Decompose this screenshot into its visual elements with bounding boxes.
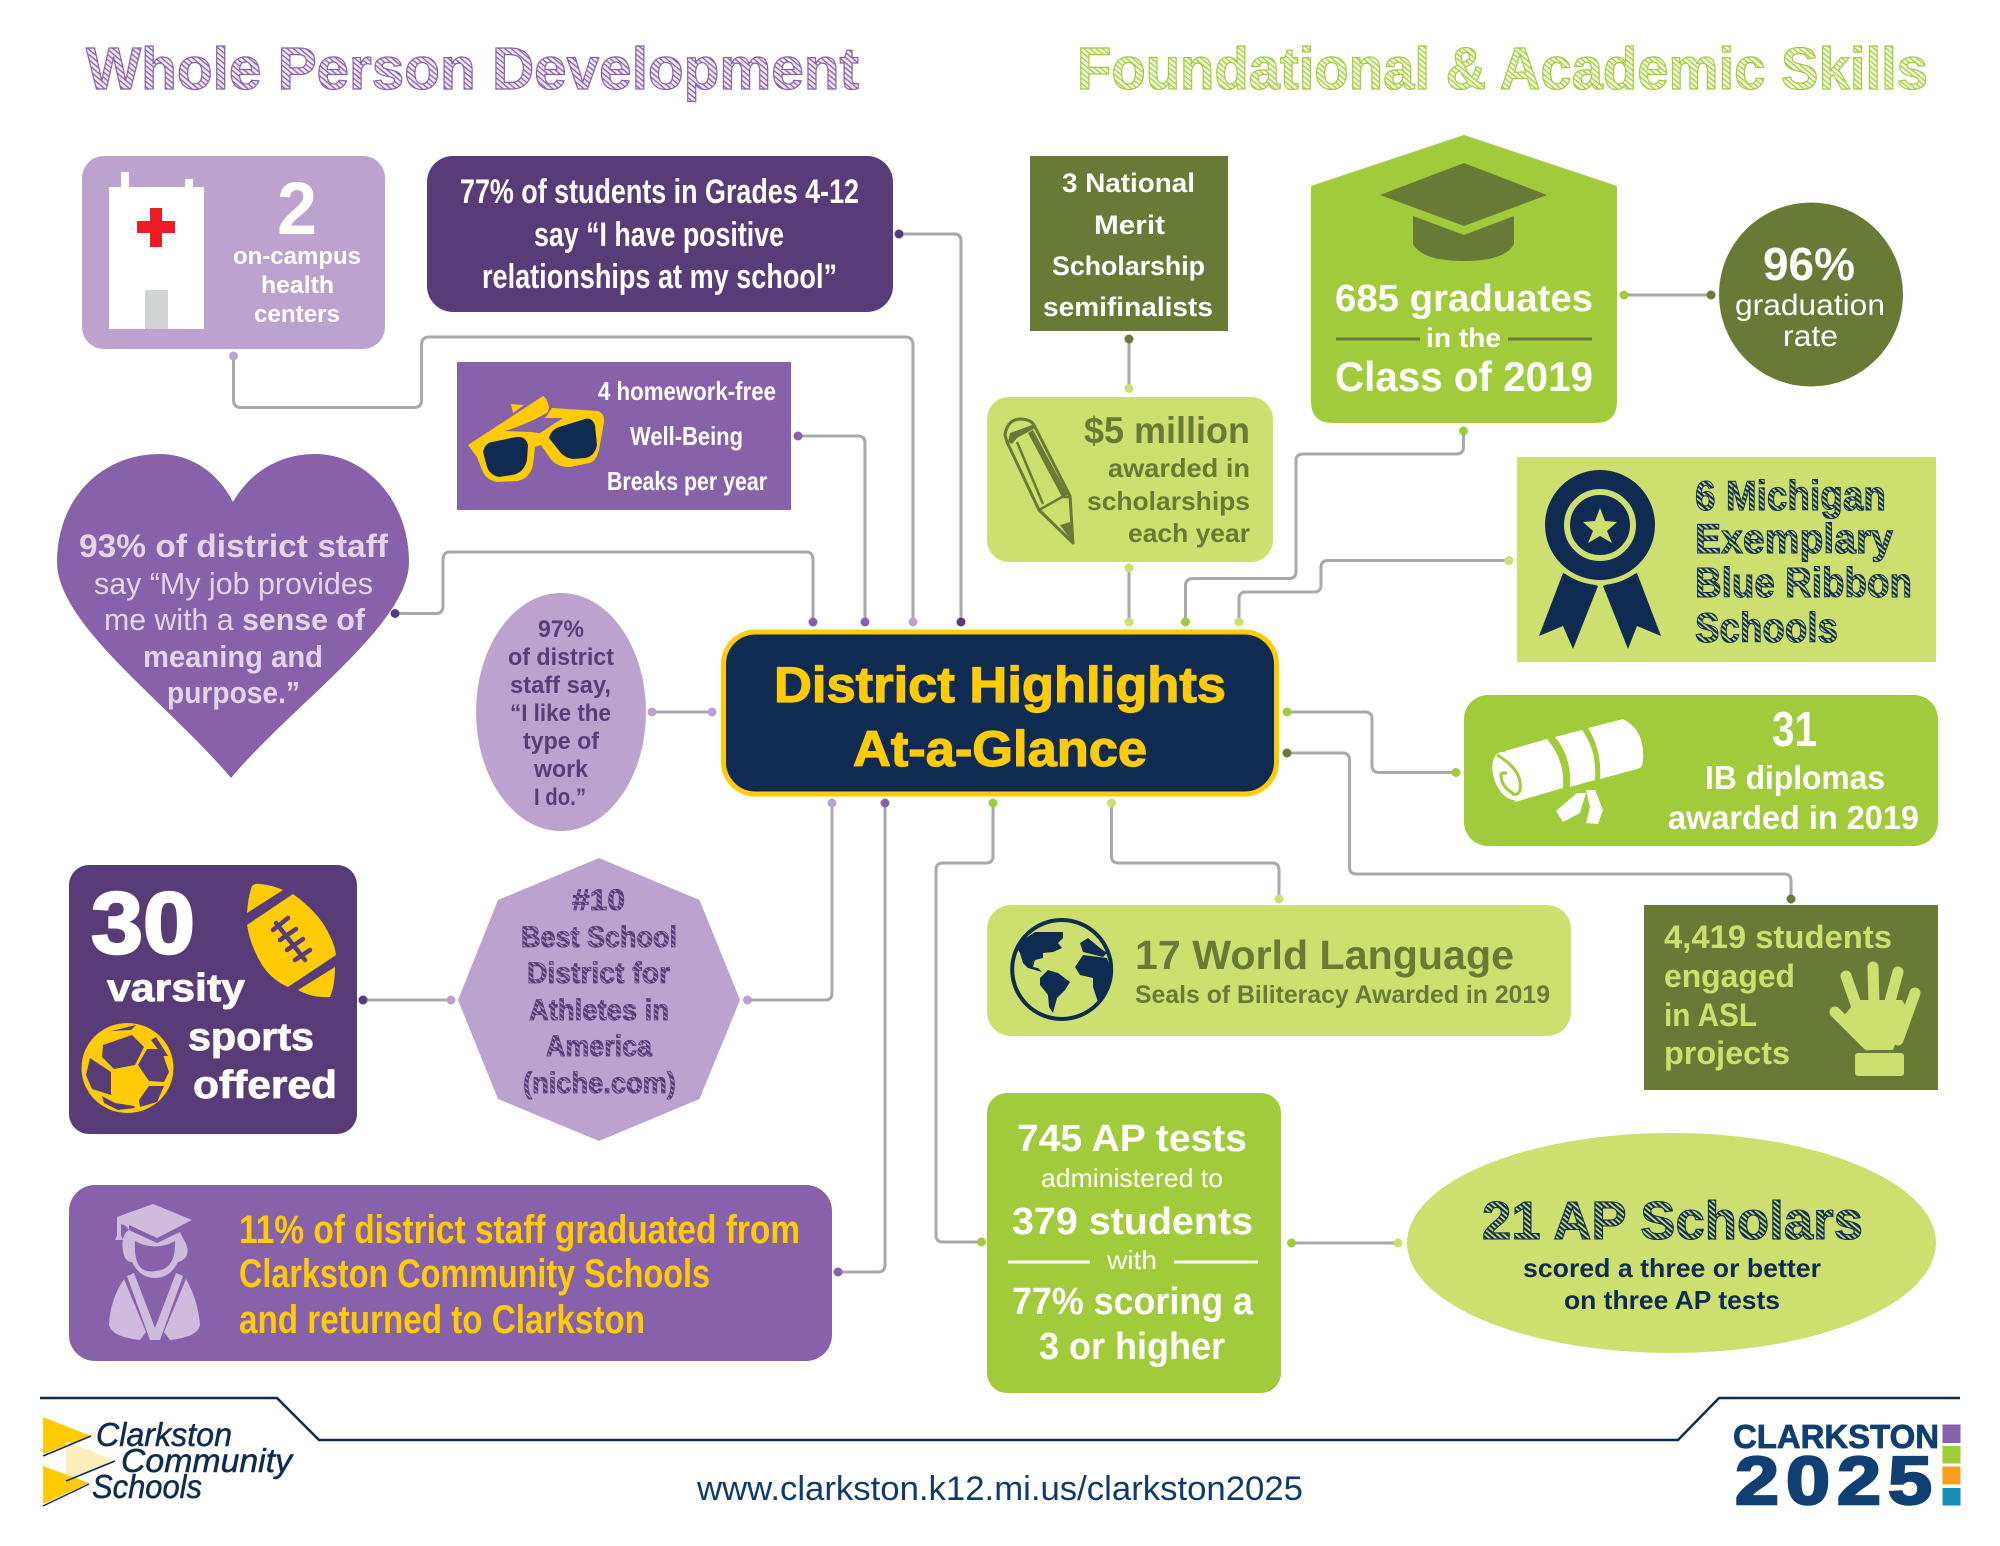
icon: graduation cap <box>1380 163 1547 261</box>
connector: center to ASL <box>1282 748 1796 904</box>
text: 17 world language seals: 17 World Language <box>1135 932 1514 978</box>
text: varsity sports offered <box>107 967 337 1107</box>
text: AP test statistics: 379 students <box>1012 1201 1253 1243</box>
connector: oval to center <box>648 708 716 716</box>
text: #10 best school district: Athletes in <box>529 994 669 1027</box>
text: varsity sports offered: sports <box>188 1016 314 1059</box>
text: sense of meaning: me with a sense of <box>104 602 366 637</box>
panel: AP tests <box>987 1093 1281 1393</box>
text: 4,419 students: in ASL <box>1664 997 1757 1033</box>
text: on-campus health centers: on-campus <box>233 243 361 270</box>
text: sense of meaning: say “My job provides <box>94 566 373 601</box>
text: District Highlights At-a-Glance: District Highlights <box>774 657 1226 713</box>
text: AP test statistics: with <box>1106 1245 1157 1275</box>
text: 96 percent graduation rate: rate <box>1783 320 1838 353</box>
icon: football <box>247 884 336 997</box>
text: sense of meaning: purpose.” <box>167 675 300 710</box>
connector: health centers to center <box>229 337 918 626</box>
connector: heart to center <box>390 552 818 626</box>
text: 685 graduates class of 2019: 685 graduates <box>1335 278 1593 320</box>
text: #10 best school district: Best School <box>521 921 677 954</box>
text: 11 percent alumni: Clarkston Community Schools <box>239 1252 710 1296</box>
text: #10 best school district <box>521 884 677 1100</box>
panel: staff alumni <box>69 1185 832 1361</box>
text: 5 million scholarships: $5 million <box>1084 410 1250 451</box>
text: 11 percent alumni <box>239 1208 800 1342</box>
text: on-campus health centers: health <box>261 272 334 299</box>
text: AP test statistics: 745 AP tests <box>1017 1118 1247 1160</box>
text: IB diplomas awarded: awarded in 2019 <box>1668 799 1919 836</box>
footer rule <box>40 1398 1960 1440</box>
panel: national merit <box>1030 156 1228 331</box>
text: varsity sports offered: offered <box>193 1064 337 1107</box>
text: 685 graduates class of 2019: Class of 2019 <box>1335 353 1593 400</box>
panel: heart staff quote <box>57 454 409 778</box>
panel: graduation rate <box>1719 202 1903 386</box>
stat: 2: 2 <box>277 167 317 250</box>
text: homework-free breaks <box>598 376 776 496</box>
text: merit semifinalists: semifinalists <box>1043 292 1213 322</box>
logo: Clarkston 2025: CLARKSTON <box>1733 1418 1939 1455</box>
text: on-campus health centers: centers <box>254 301 340 328</box>
logo: Clarkston Community Schools: Community <box>121 1442 295 1479</box>
text: #10 best school district: District for <box>527 957 670 990</box>
text: 97 percent quote: of district <box>508 644 614 671</box>
text: 77 percent quote: say “I have positive <box>534 216 784 254</box>
text: #10 best school district: #10 <box>572 884 625 917</box>
icon: soccer ball <box>82 1023 174 1113</box>
text: 4,419 students: projects <box>1664 1035 1790 1071</box>
text: 17 world language seals <box>1135 932 1550 1009</box>
logo: Clarkston Community Schools: Schools <box>92 1468 202 1505</box>
logo: Clarkston Community Schools <box>43 1416 295 1506</box>
icon: globe <box>1012 920 1112 1019</box>
text: 5 million scholarships <box>1084 410 1250 548</box>
panel: well-being breaks <box>457 362 791 510</box>
text: District Highlights At-a-Glance <box>774 657 1226 777</box>
text: IB diplomas awarded: IB diplomas <box>1705 759 1885 796</box>
panel: best school district octagon <box>458 858 740 1141</box>
text: 6 Michigan Exemplary Blue Ribbon Schools: Schools <box>1695 604 1838 651</box>
panel: health centers <box>82 156 385 349</box>
connector: well-being breaks to center <box>794 432 870 626</box>
text: 97 percent quote <box>508 616 614 811</box>
text: sense of meaning <box>79 528 388 710</box>
text: AP test statistics: administered to <box>1041 1163 1223 1193</box>
text: 77 percent quote: relationships at my school” <box>482 258 837 296</box>
text: 685 graduates class of 2019 <box>1335 278 1593 400</box>
text: homework-free breaks: Breaks per year <box>607 466 767 496</box>
text: 11 percent alumni: and returned to Clarkston <box>239 1298 645 1342</box>
text: 5 million scholarships: each year <box>1128 518 1250 548</box>
text: merit semifinalists: Scholarship <box>1052 251 1205 281</box>
text: 6 Michigan Exemplary Blue Ribbon Schools: Exemplary <box>1695 515 1894 562</box>
text: scored three or better: scored a three or better <box>1523 1253 1821 1283</box>
panel: positive relationships <box>427 156 893 312</box>
text: 6 Michigan Exemplary Blue Ribbon Schools: 6 Michigan <box>1695 472 1886 519</box>
panel: sports <box>69 865 357 1134</box>
text: District Highlights At-a-Glance: At-a-Glance <box>853 721 1147 777</box>
icon: pencil <box>1005 419 1073 543</box>
heading: Foundational and Academic Skills: Foundational & Academic Skills <box>1077 36 1928 102</box>
connector: blue ribbon to center <box>1234 556 1514 626</box>
text: 5 million scholarships: awarded in <box>1108 453 1250 483</box>
heading: Whole Person Development: Whole Person Development <box>86 36 859 102</box>
text: sense of meaning: 93% of district staff <box>79 528 388 564</box>
text: 77 percent quote <box>460 173 859 296</box>
panel: world language <box>987 905 1571 1036</box>
text: homework-free breaks: Well-Being <box>630 421 743 451</box>
text: 21 AP Scholars: 21 AP Scholars <box>1482 1191 1863 1251</box>
text: merit semifinalists <box>1043 168 1213 322</box>
text: varsity sports offered: varsity <box>107 967 245 1010</box>
connector: merit to scholarships <box>1124 334 1134 393</box>
text: 6 Michigan Exemplary Blue Ribbon Schools: Blue Ribbon <box>1695 559 1912 606</box>
text: 6 Michigan Exemplary Blue Ribbon Schools <box>1695 472 1912 651</box>
connector: center to AP tests <box>936 798 998 1246</box>
text: #10 best school district: (niche.com) <box>523 1067 676 1100</box>
panel: oval staff quote <box>476 593 646 831</box>
text: 11 percent alumni: 11% of district staff graduated from <box>239 1208 800 1252</box>
text: 97 percent quote: staff say, <box>510 672 611 699</box>
connector: center to IB diplomas <box>1282 708 1460 777</box>
panel: AP scholars <box>1407 1133 1936 1353</box>
stat: 30: 30 <box>91 875 195 972</box>
text: 97 percent quote: I do.” <box>534 784 586 811</box>
icon: diploma scroll <box>1486 719 1643 824</box>
text: 17 world language seals: Seals of Biliteracy Awarded in 2019 <box>1135 981 1550 1009</box>
text: 77 percent quote: 77% of students in Grades 4-12 <box>460 173 859 211</box>
text: merit semifinalists: 3 National <box>1062 168 1195 198</box>
text: AP test statistics <box>1008 1118 1258 1368</box>
icon: graduate <box>109 1204 200 1340</box>
text: #10 best school district: America <box>546 1030 652 1063</box>
panel: ASL projects <box>1644 905 1938 1090</box>
text: scored three or better: on three AP tests <box>1564 1285 1780 1315</box>
connector: best district to center <box>743 798 836 1004</box>
connector: graduates to rate <box>1620 290 1716 300</box>
panel: graduates house <box>1311 135 1617 423</box>
text: 96 percent graduation rate: 96% <box>1763 238 1855 290</box>
connector: relationships to center <box>894 230 966 626</box>
connector: center to world language <box>1107 798 1284 904</box>
text: merit semifinalists: Merit <box>1094 210 1165 240</box>
logo: Clarkston 2025 <box>1733 1418 1960 1519</box>
text: 97 percent quote: work <box>533 756 589 783</box>
text: 96 percent graduation rate: graduation <box>1735 289 1885 322</box>
logo: Clarkston 2025: 2025 <box>1735 1443 1939 1519</box>
text: IB diplomas awarded <box>1668 759 1919 836</box>
connector: graduates to center <box>1181 426 1468 626</box>
text: scored three or better <box>1523 1253 1821 1315</box>
panel: blue ribbon <box>1517 457 1936 662</box>
text: 685 graduates class of 2019: in the <box>1426 323 1501 353</box>
icon: ribbon medal <box>1539 468 1661 649</box>
text: 97 percent quote: 97% <box>538 616 584 643</box>
connector: AP tests to scholars <box>1287 1238 1402 1248</box>
text: 97 percent quote: “I like the <box>510 700 611 727</box>
text: 97 percent quote: type of <box>523 728 600 755</box>
text: 96 percent graduation rate <box>1735 238 1885 353</box>
text: sense of meaning: meaning and <box>143 639 323 674</box>
text: 5 million scholarships: scholarships <box>1087 486 1250 516</box>
text: homework-free breaks: 4 homework-free <box>598 376 776 406</box>
text: 4,419 students <box>1664 919 1892 1071</box>
website url: www.clarkston.k12.mi.us/clarkston2025 <box>696 1470 1303 1508</box>
text: 4,419 students: engaged <box>1664 958 1795 994</box>
connector: staff alumni to center <box>834 798 890 1276</box>
logo: Clarkston Community Schools: Clarkston <box>96 1416 232 1453</box>
text: AP test statistics: 3 or higher <box>1039 1326 1225 1368</box>
panel: IB diplomas <box>1464 695 1938 846</box>
panel: center title <box>724 632 1276 794</box>
icon: hospital building <box>109 172 204 329</box>
icon: sunglasses <box>468 396 604 482</box>
text: AP test statistics: 77% scoring a <box>1012 1281 1254 1323</box>
text: 4,419 students: 4,419 students <box>1664 919 1892 955</box>
stat: 31: 31 <box>1772 703 1817 757</box>
icon: hand <box>1835 967 1915 1076</box>
text: on-campus health centers <box>233 243 361 328</box>
connector: sports to best district <box>358 996 456 1004</box>
panel: scholarships <box>987 397 1273 562</box>
connector: scholarships to center <box>1124 564 1134 626</box>
